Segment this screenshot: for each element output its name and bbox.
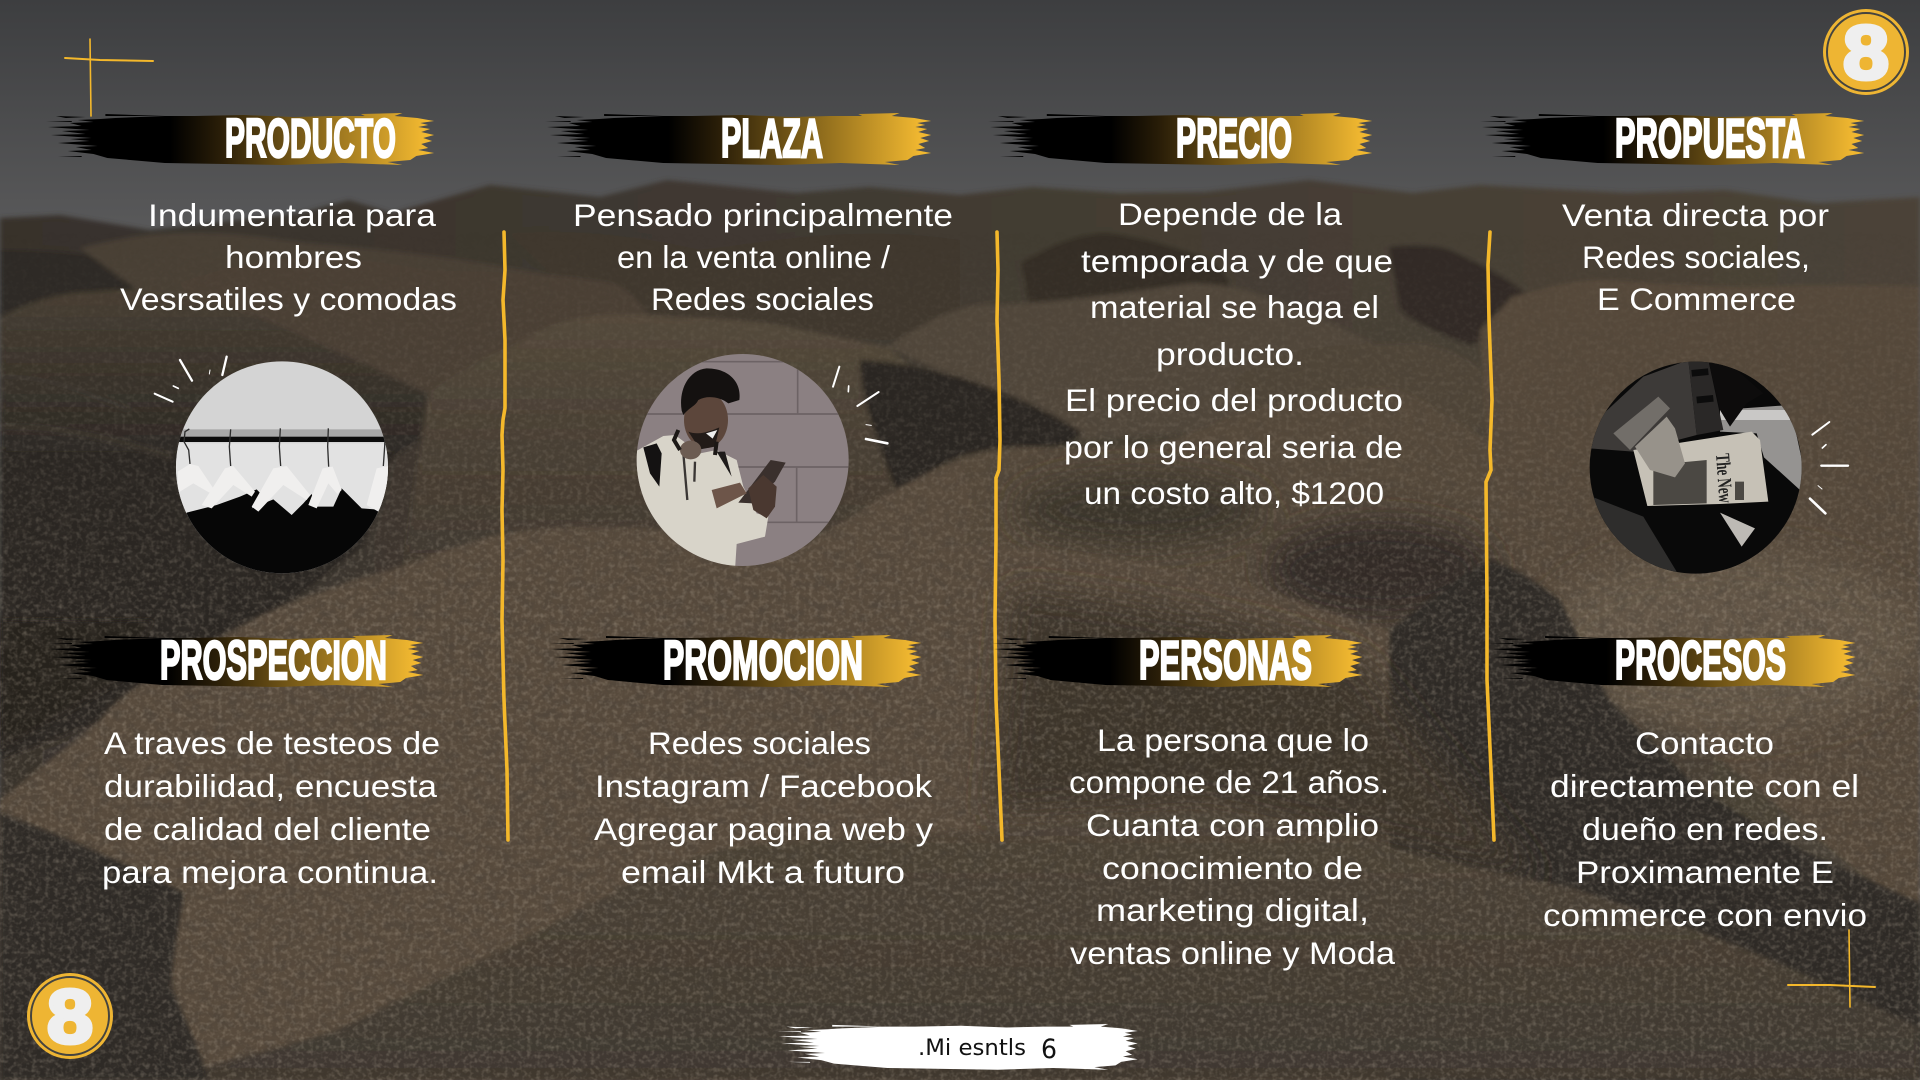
divider 1 xyxy=(502,232,508,840)
text: plaza: en la venta online / xyxy=(617,239,890,275)
text: prospeccion: de calidad del cliente xyxy=(104,811,431,847)
heading: PRECIO xyxy=(988,107,1372,169)
text: precio xyxy=(1064,196,1403,511)
text: producto: Vesrsatiles y comodas xyxy=(120,281,457,317)
text: prospeccion xyxy=(102,725,440,890)
text: promocion: Instagram / Facebook xyxy=(595,768,932,804)
heading: PROCESOS: PROCESOS xyxy=(1615,629,1786,691)
text: propuesta: E Commerce xyxy=(1597,281,1796,317)
text: plaza: Pensado principalmente xyxy=(573,197,953,233)
panel: plaza xyxy=(545,107,953,570)
heading: PROSPECCION: PROSPECCION xyxy=(160,629,387,691)
heading: PROSPECCION xyxy=(47,629,423,691)
text: precio: material se haga el xyxy=(1090,289,1379,325)
badge top right: 8 xyxy=(1843,11,1889,96)
panel: propuesta xyxy=(1480,107,1864,578)
heading: PROPUESTA xyxy=(1480,107,1864,169)
text: promocion: Redes sociales xyxy=(648,725,871,761)
newspaper masthead: The New xyxy=(1711,453,1736,504)
badge bottom left: 8 xyxy=(47,975,93,1060)
heading: PRODUCTO: PRODUCTO xyxy=(225,107,396,169)
text: plaza: Redes sociales xyxy=(651,281,874,317)
panel: precio xyxy=(988,107,1403,511)
text: precio: producto. xyxy=(1156,336,1304,372)
text: propuesta: Venta directa por xyxy=(1562,197,1829,233)
text: propuesta xyxy=(1562,197,1829,317)
decorative cross top left xyxy=(65,39,153,116)
text: plaza xyxy=(573,197,953,317)
text: personas: compone de 21 años. xyxy=(1069,764,1389,800)
footer label: brand and page number: 6 xyxy=(1041,1034,1057,1065)
text: procesos: Contacto xyxy=(1635,725,1774,761)
phone and hands xyxy=(738,460,786,503)
photo: hands holding a newspaper xyxy=(1587,358,1848,578)
soft shadows on the mid hills xyxy=(1015,474,1920,730)
text: prospeccion: A traves de testeos de xyxy=(104,725,440,761)
text: personas xyxy=(1069,722,1396,971)
heading: PLAZA: PLAZA xyxy=(721,107,823,169)
footer label: brand and page number: .Mi esntls xyxy=(918,1036,1026,1061)
text: producto xyxy=(120,197,457,317)
heading: PROCESOS xyxy=(1489,629,1856,691)
text: promocion: Agregar pagina web y xyxy=(594,811,933,847)
sparkle lines xyxy=(833,367,887,443)
text: promocion xyxy=(594,725,933,890)
text: personas: ventas online y Moda xyxy=(1070,935,1396,971)
heading: PERSONAS: PERSONAS xyxy=(1139,629,1312,691)
text: precio: por lo general seria de xyxy=(1064,429,1403,465)
text: prospeccion: durabilidad, encuesta xyxy=(104,768,438,804)
heading: PERSONAS xyxy=(992,629,1362,691)
text: producto: Indumentaria para xyxy=(148,197,437,233)
panel: personas xyxy=(992,629,1396,971)
heading: PLAZA xyxy=(545,107,931,169)
heading: PROMOCION xyxy=(549,629,921,691)
footer label: brand and page number xyxy=(777,1024,1138,1070)
panel: promocion xyxy=(549,629,933,890)
panel: procesos xyxy=(1489,629,1867,933)
text: procesos: commerce con envio xyxy=(1543,897,1867,933)
soft shade on the lower centre hill xyxy=(990,590,1540,880)
text: procesos: dueño en redes. xyxy=(1582,811,1828,847)
text: producto: hombres xyxy=(225,239,362,275)
decorative cross bottom right xyxy=(1788,930,1875,1007)
divider 2 xyxy=(995,232,1002,840)
text: personas: conocimiento de xyxy=(1102,850,1363,886)
hoodie xyxy=(633,435,768,570)
photo: man using a phone xyxy=(633,350,887,570)
badge bottom left xyxy=(27,973,113,1060)
badge top right xyxy=(1823,9,1909,96)
head xyxy=(684,392,728,448)
text: propuesta: Redes sociales, xyxy=(1582,239,1810,275)
text: precio: El precio del producto xyxy=(1065,382,1403,418)
sparkle lines xyxy=(155,357,227,402)
text: personas: Cuanta con amplio xyxy=(1086,807,1379,843)
text: precio: Depende de la xyxy=(1118,196,1343,232)
text: personas: marketing digital, xyxy=(1096,892,1369,928)
text: procesos xyxy=(1543,725,1867,933)
divider 3 xyxy=(1486,232,1494,840)
text: personas: La persona que lo xyxy=(1097,722,1369,758)
sparkle lines xyxy=(1810,422,1848,513)
text: procesos: Proximamente E xyxy=(1576,854,1834,890)
text: precio: un costo alto, $1200 xyxy=(1084,475,1384,511)
text: procesos: directamente con el xyxy=(1550,768,1859,804)
text: prospeccion: para mejora continua. xyxy=(102,854,438,890)
text: precio: temporada y de que xyxy=(1081,243,1393,279)
text: promocion: email Mkt a futuro xyxy=(621,854,905,890)
panel: prospeccion xyxy=(47,629,440,890)
clothes xyxy=(186,488,380,574)
heading: PROMOCION: PROMOCION xyxy=(663,629,863,691)
panel: producto xyxy=(46,107,457,580)
photo: hangers on a rail xyxy=(155,357,393,580)
heading: PRECIO: PRECIO xyxy=(1176,107,1292,169)
heading: PRODUCTO xyxy=(46,107,434,169)
